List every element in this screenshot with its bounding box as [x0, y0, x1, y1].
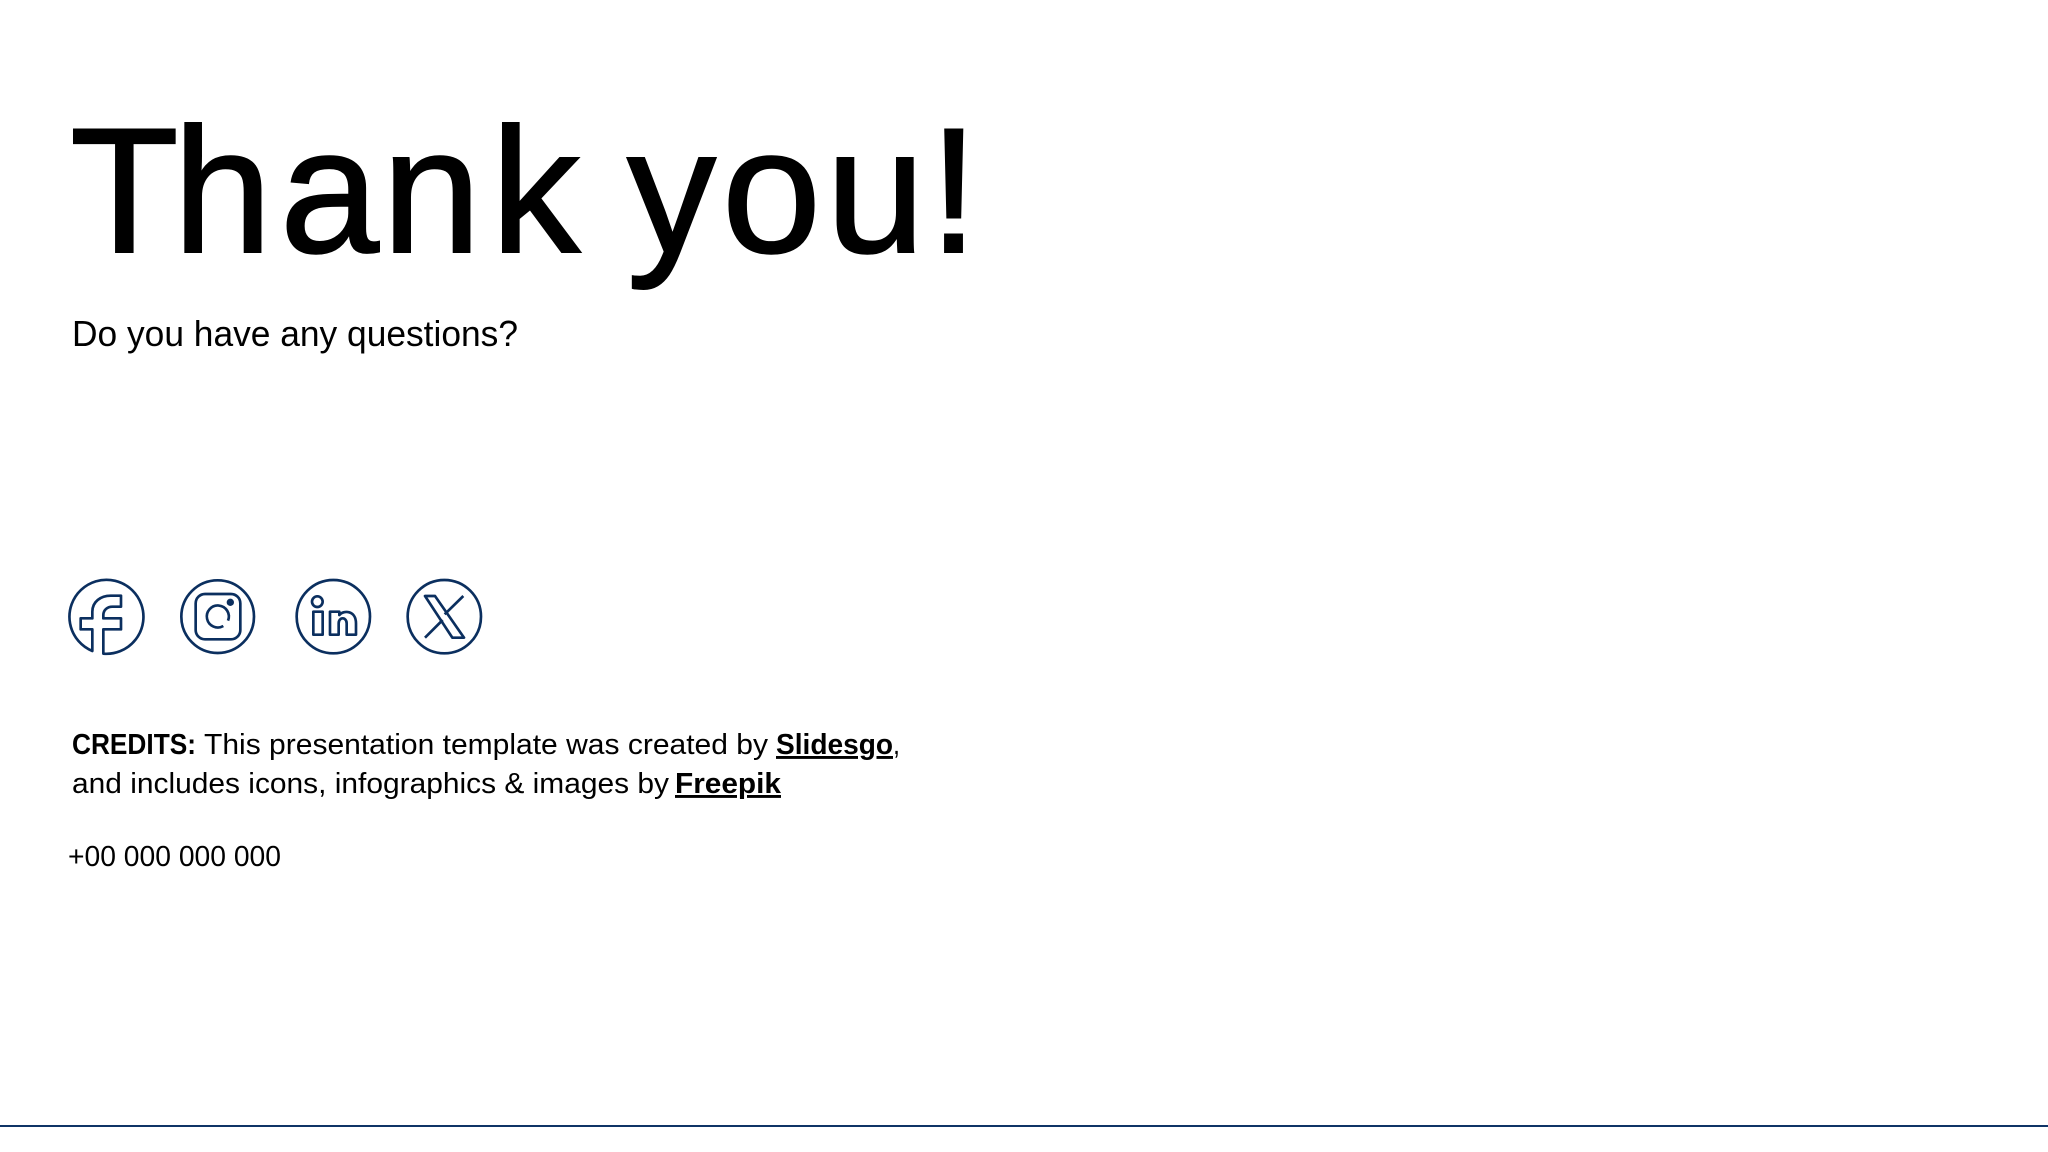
icon: linkedin: [297, 580, 370, 653]
phone number: +00 000 000 000: [68, 841, 281, 873]
social icons: [69, 580, 481, 654]
credits text: CREDITS:: [72, 729, 196, 761]
icon: instagram: [181, 580, 254, 653]
subtitle: Do you have any questions?: [72, 313, 518, 354]
credits text: Slidesgo: [776, 729, 893, 761]
title: Thankyou!: [70, 91, 978, 290]
credits text: and includes icons, infographics & images by: [72, 768, 670, 800]
icon: facebook: [69, 580, 143, 654]
icon: x: [408, 580, 481, 653]
credits text: ,: [893, 729, 900, 761]
credits text: Freepik: [675, 768, 782, 800]
credits text: [72, 729, 900, 800]
credits text: This presentation template was created by: [204, 729, 769, 761]
footer line: [0, 1125, 2048, 1127]
